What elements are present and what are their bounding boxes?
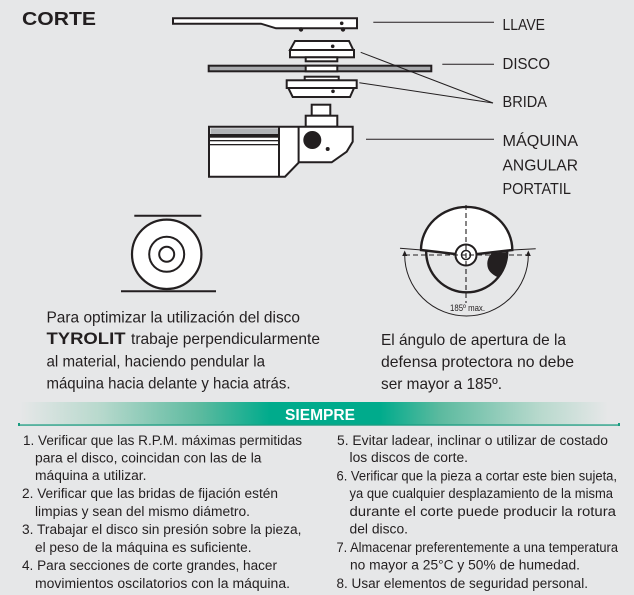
list: right column: 5. Evitar ladear, inclinar o utilizar de costado <box>337 433 608 448</box>
list: left column: máquina a utilizar. <box>35 468 146 483</box>
disc part <box>209 66 431 71</box>
list: left column: limpias y sean del mismo diámetro. <box>35 504 250 519</box>
list: left column: movimientos oscilatorios con la máquina. <box>35 576 290 591</box>
guard angle diagram: 185º max. <box>450 303 485 314</box>
list: left column <box>22 433 302 591</box>
part labels: MÁQUINA <box>502 131 578 150</box>
paragraph: guard angle: ser mayor a 185º. <box>381 376 502 393</box>
exploded diagram: angle grinder assembly <box>173 18 431 177</box>
list: left column: el peso de la máquina es suficiente. <box>35 540 252 555</box>
list: right column: 7. Almacenar preferentemente a una temperatura <box>336 540 618 555</box>
paragraph: disc usage: al material, haciendo pendular la <box>46 354 265 370</box>
paragraph: guard angle: El ángulo de apertura de la <box>381 332 566 349</box>
paragraph: disc usage: trabaje perpendicularmente <box>131 331 320 348</box>
list: right column: no mayor a 25°C y 50% de humedad. <box>350 558 580 572</box>
wrench part <box>173 18 357 32</box>
list: right column: durante el corte puede producir la rotura <box>350 504 617 519</box>
title: CORTE <box>22 9 96 29</box>
banner: siempre: SIEMPRE <box>285 407 355 424</box>
paragraph: disc usage: máquina hacia delante y hacia atrás. <box>46 376 290 392</box>
list: right column: 6. Verificar que la pieza a cortar este bien sujeta, <box>336 468 617 484</box>
banner: siempre <box>18 402 620 426</box>
part labels: DISCO <box>502 56 550 73</box>
list: left column: para el disco, coincidan con las de la <box>35 450 262 466</box>
upper flange part <box>290 41 354 61</box>
part labels: BRIDA <box>502 94 547 111</box>
paragraph: disc usage: Para optimizar la utilización del disco <box>46 310 300 326</box>
list: right column: del disco. <box>350 522 408 536</box>
part labels: LLAVE <box>502 17 545 34</box>
list: right column: 8. Usar elementos de seguridad personal. <box>336 576 588 591</box>
list: right column: los discos de corte. <box>350 450 468 465</box>
lower flange part <box>287 77 357 97</box>
part labels: PORTATIL <box>502 181 571 198</box>
disc on material diagram <box>121 216 216 291</box>
paragraph: guard angle <box>381 332 574 393</box>
paragraph: disc usage: TYROLIT <box>46 329 126 348</box>
part labels <box>502 17 578 198</box>
list: left column: 3. Trabajar el disco sin presión sobre la pieza, <box>22 522 302 537</box>
paragraph: guard angle: defensa protectora no debe <box>381 354 574 371</box>
list: right column: ya que cualquier desplazamiento de la misma <box>350 486 613 501</box>
list: left column: 2. Verificar que las bridas de fijación estén <box>22 486 278 501</box>
list: right column <box>336 433 618 591</box>
list: left column: 4. Para secciones de corte grandes, hacer <box>22 558 277 573</box>
part labels: ANGULAR <box>502 158 578 174</box>
angle grinder part <box>209 105 353 177</box>
list: left column: 1. Verificar que las R.P.M. máximas permitidas <box>23 433 302 448</box>
guard angle diagram <box>400 205 536 316</box>
paragraph: disc usage <box>46 310 320 392</box>
leader lines <box>359 22 494 139</box>
